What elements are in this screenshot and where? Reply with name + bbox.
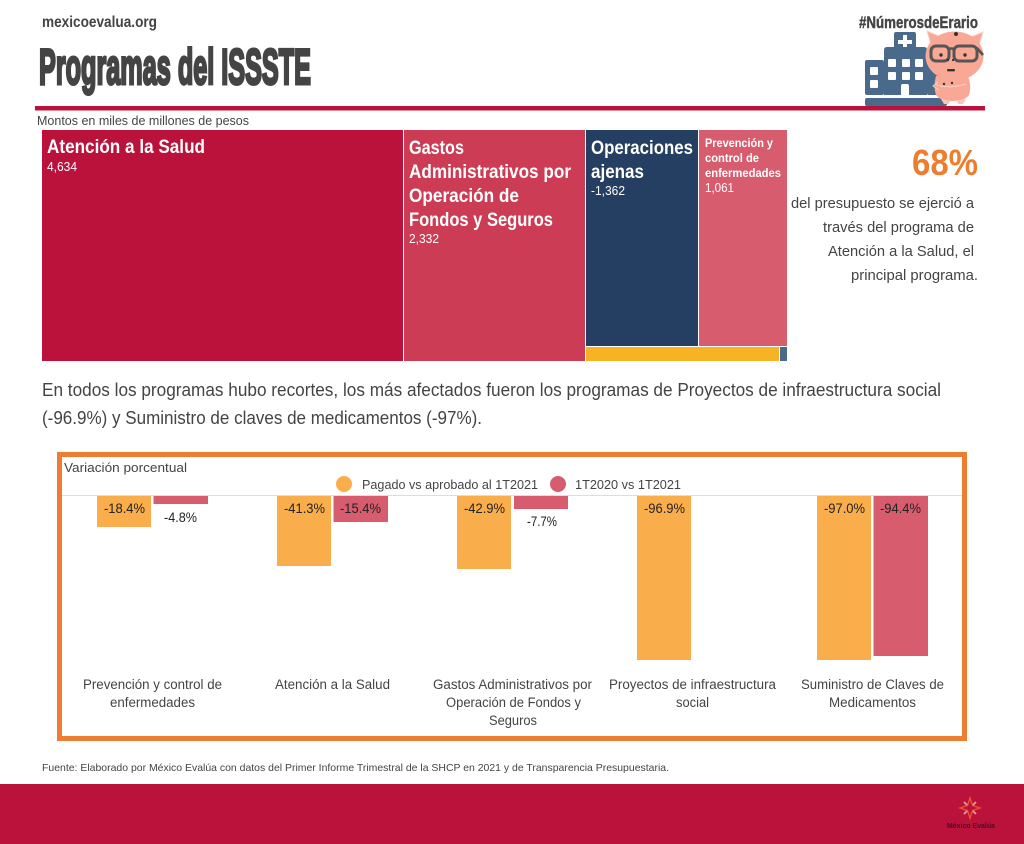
summary paragraph bbox=[42, 380, 941, 428]
panel: variación porcentual bbox=[60, 454, 964, 738]
callout: 68%: del presupuesto se ejerció a bbox=[791, 195, 975, 212]
treemap cell: Gastos Administrativos: Operación de bbox=[409, 186, 519, 207]
bars: Atención a la Salud: -15.4% bbox=[340, 501, 381, 516]
treemap cell: Prevención y control: Prevención y bbox=[705, 138, 774, 150]
treemap cell: Atención a la Salud: Atención a la Salud bbox=[47, 137, 205, 158]
treemap cell: Prevención y control bbox=[699, 130, 787, 346]
treemap cell: small yellow bbox=[586, 347, 779, 361]
bars: Atención a la Salud: Atención a la Salud bbox=[275, 677, 390, 692]
legend: Pagado vs aprobado al 1T2021 bbox=[362, 477, 538, 492]
callout: 68%: través del programa de bbox=[823, 219, 974, 236]
treemap cell: Prevención y control: control de bbox=[705, 153, 759, 165]
treemap cell: Atención a la Salud: 4,634 bbox=[47, 160, 77, 174]
bars: Suministro de Claves de Medicamentos: Suministro de Claves de bbox=[801, 677, 944, 692]
bars: Suministro de Claves de Medicamentos: Medicamentos bbox=[829, 695, 916, 710]
bars: Prevención y control de enfermedades: enfermedades bbox=[110, 695, 195, 710]
summary paragraph: (-96.9%) y Suministro de claves de medicamentos (-97%). bbox=[42, 408, 482, 428]
bars: Gastos Administrativos: -7.7% bbox=[527, 514, 557, 529]
bars: Proyectos de infraestructura social bbox=[609, 496, 776, 710]
treemap subtitle: Montos en miles de millones de pesos bbox=[37, 113, 249, 128]
bars: Proyectos de infraestructura social: -96.9% bbox=[644, 501, 685, 516]
callout: 68%: principal programa. bbox=[851, 267, 978, 284]
callout: 68%: 68% bbox=[912, 142, 978, 183]
bars: Proyectos de infraestructura social: social bbox=[676, 695, 709, 710]
icon: México Evalúa logo: México Evalúa bbox=[947, 823, 995, 830]
bars: Proyectos de infraestructura social: Proyectos de infraestructura bbox=[609, 677, 776, 692]
bars: Atención a la Salud bbox=[275, 496, 390, 692]
treemap cell: Gastos Administrativos: 2,332 bbox=[409, 232, 439, 246]
callout: 68% bbox=[791, 142, 978, 284]
bars: Atención a la Salud: -41.3% bbox=[284, 501, 325, 516]
legend bbox=[336, 476, 681, 492]
treemap cell: Prevención y control: enfermedades bbox=[705, 168, 781, 180]
bars: Gastos Administrativos: Operación de Fondos y bbox=[446, 695, 581, 710]
treemap cell: Operaciones ajenas: ajenas bbox=[591, 162, 644, 183]
treemap cell: Gastos Administrativos: Gastos bbox=[409, 138, 464, 159]
footer band bbox=[0, 784, 1024, 844]
bars: Suministro de Claves de Medicamentos: -97.0% bbox=[824, 501, 865, 516]
bars: Prevención y control de enfermedades: Prevención y control de bbox=[83, 677, 222, 692]
treemap cell: small blue bbox=[780, 347, 787, 361]
header rule bbox=[35, 106, 985, 110]
bars: Gastos Administrativos: -42.9% bbox=[464, 501, 505, 516]
hashtag: #NúmerosdeErario bbox=[859, 14, 978, 32]
chart heading: Variación porcentual bbox=[64, 460, 187, 475]
bars: Gastos Administrativos: Seguros bbox=[489, 713, 537, 728]
title: Programas del ISSSTE bbox=[39, 39, 311, 95]
bars: Prevención y control de enfermedades: -18.4% bbox=[104, 501, 145, 516]
summary paragraph: En todos los programas hubo recortes, los más afectados fueron los programas de Proyectos de infraestructura social bbox=[42, 380, 941, 400]
site name: mexicoevalua.org bbox=[42, 14, 157, 31]
legend: 1T2020 vs 1T2021 bbox=[575, 477, 681, 492]
bars: Suministro de Claves de Medicamentos: -94.4% bbox=[880, 501, 921, 516]
treemap cell: Operaciones ajenas bbox=[586, 130, 698, 346]
bars: Prevención y control de enfermedades bbox=[83, 496, 222, 710]
icon: México Evalúa logo bbox=[947, 798, 995, 830]
treemap cell: Gastos Administrativos: Administrativos por bbox=[409, 162, 572, 183]
treemap cell: Operaciones ajenas: -1,362 bbox=[591, 184, 625, 198]
bars: Prevención y control de enfermedades: -4.8% bbox=[164, 510, 197, 525]
icon: pig with glasses bbox=[926, 31, 984, 104]
source note: Fuente: Elaborado por México Evalúa con datos del Primer Informe Trimestral de la SHCP en 2021 y de Transparencia Presupuestaria. bbox=[42, 762, 669, 774]
treemap cell: Gastos Administrativos bbox=[404, 130, 585, 361]
callout: 68%: Atención a la Salud, el bbox=[828, 243, 974, 260]
treemap cell: Prevención y control: 1,061 bbox=[705, 181, 734, 195]
bars: Gastos Administrativos bbox=[433, 496, 592, 728]
bar chart bbox=[83, 496, 944, 728]
treemap cell: Atención a la Salud bbox=[42, 130, 403, 361]
treemap bbox=[42, 130, 787, 361]
treemap cell: Operaciones ajenas: Operaciones bbox=[591, 138, 693, 159]
treemap cell: Gastos Administrativos: Fondos y Seguros bbox=[409, 210, 553, 231]
bars: Gastos Administrativos: Gastos Administrativos por bbox=[433, 677, 592, 692]
icon: hospital bbox=[865, 32, 947, 106]
bars: Suministro de Claves de Medicamentos bbox=[801, 496, 944, 710]
